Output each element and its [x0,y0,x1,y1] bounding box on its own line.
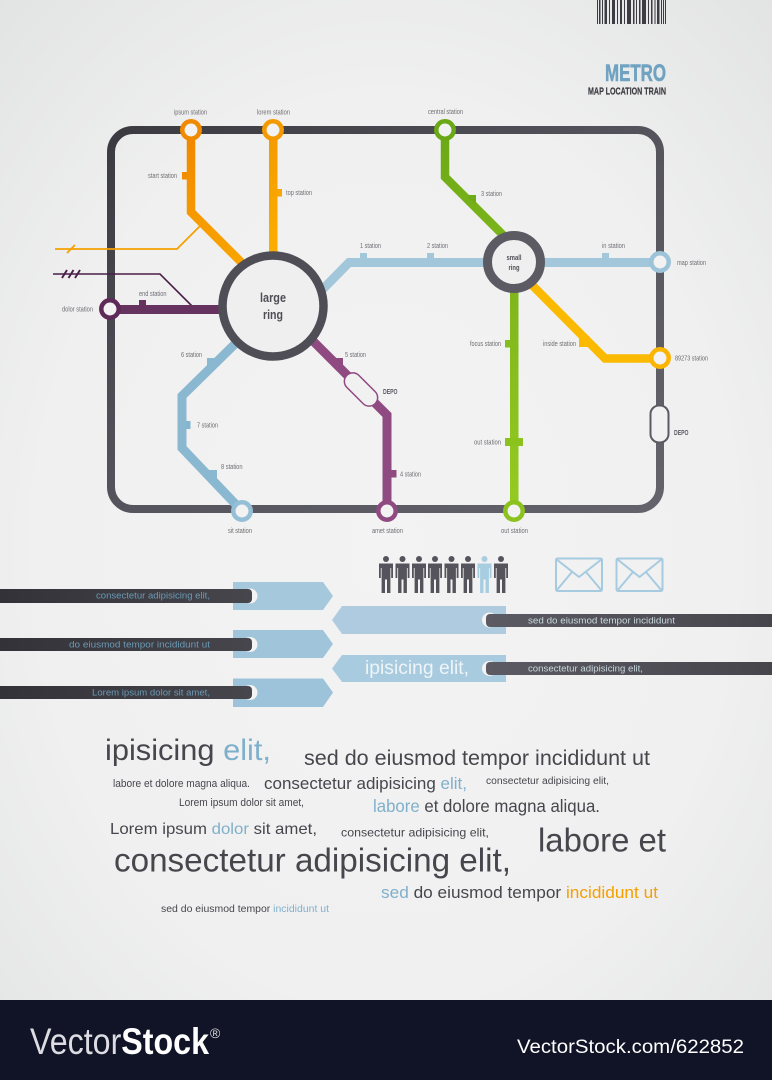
left tag 1 [0,582,333,610]
line: purple dolor [110,289,222,314]
small ring: ring [508,263,520,272]
line: light blue south west: 6 station [181,350,202,359]
text cloud: sed do eiusmod tempor incididunt ut [304,747,650,770]
text cloud: Lorem ipsum dolor sit amet, [110,821,317,838]
right tag 1 [332,606,772,634]
station labels: sit station [228,526,252,535]
footer band: VectorStock.com/622852 [517,1036,744,1058]
station labels: central station [428,107,463,116]
small ring: small [506,253,522,262]
text cloud: sed do eiusmod tempor incididunt ut [381,883,658,902]
left tag 1: consectetur adipisicing elit, [96,590,210,602]
line: orange top: top station [286,188,312,197]
line: green central: 3 station [481,189,502,198]
line: green south [470,290,523,511]
line: green central [445,130,503,235]
line: light blue south west: 8 station [221,462,242,471]
text cloud: sed do eiusmod tempor incididunt ut [161,903,329,915]
line: orange start [148,130,245,266]
depo: diagonal: DEPO [383,387,398,396]
barcode [597,0,666,24]
depo: right side: DEPO [674,428,689,437]
left tag 3 [0,678,333,707]
large ring: large [260,290,286,305]
people icons [379,556,508,593]
right tag 2: ipisicing elit, [365,658,469,679]
text cloud: consectetur adipisicing elit, [114,842,511,878]
line: light blue east [322,241,706,290]
line: light blue east: in station [602,241,625,250]
text cloud: ipisicing elit, [105,734,271,767]
station labels: out station [501,526,528,535]
line: purple dolor: end station [139,289,166,298]
line: purple south: 5 station [345,350,366,359]
right tag 1: sed do eiusmod tempor incididunt [528,616,675,626]
title: MAP LOCATION TRAIN [588,86,666,98]
metro frame line [111,130,660,509]
station labels [62,107,528,535]
left tag 2 [0,630,333,658]
line: light blue east: 1 station [360,241,381,250]
text cloud: consectetur adipisicing elit, [486,776,609,787]
right tag 2 [332,655,772,682]
text cloud: labore et dolore magna aliqua. [113,778,250,790]
station labels: dolor station [62,304,93,314]
depo: right side [650,406,689,442]
footer band: ® [210,1025,221,1041]
footer band [0,1000,772,1080]
line: orange start: start station [148,171,177,180]
title: METRO [605,60,666,87]
line: yellow: inside station [543,339,576,348]
text cloud: consectetur adipisicing elit, [341,826,489,840]
station labels: lorem station [257,108,290,116]
thin purple branch line [53,270,192,306]
large ring [222,256,324,356]
depo: diagonal [341,369,398,410]
station labels: amet station [372,526,403,535]
line: yellow: 89273 station [675,354,708,362]
left tag 3: Lorem ipsum dolor sit amet, [92,688,210,698]
line: light blue south west: 7 station [197,420,218,430]
left tag 2: do eiusmod tempor incididunt ut [69,640,210,650]
text cloud [105,734,666,915]
text cloud: labore et [538,822,666,858]
line: light blue south west [181,341,242,511]
title [588,60,666,98]
text cloud: consectetur adipisicing elit, [264,774,467,793]
right tag 2: consectetur adipisicing elit, [528,664,643,674]
text cloud: labore et dolore magna aliqua. [373,796,600,816]
small ring [488,236,540,288]
envelope icon 2 [616,558,662,591]
line: green south: out station [474,438,501,446]
line: purple south [312,340,421,505]
line: light blue east: 2 station [427,241,448,250]
stations [101,121,669,520]
line: green south: focus station [470,339,501,348]
envelope icon 1 [556,558,602,591]
large ring: ring [263,307,283,322]
line: light blue east: map station [677,258,706,267]
text cloud: Lorem ipsum dolor sit amet, [179,797,304,809]
line: yellow [531,284,708,362]
footer band: VectorStock [30,1021,209,1062]
thin orange branch line [55,226,200,253]
line: purple south: 4 station [400,470,421,478]
line: orange top [269,130,312,256]
station labels: ipsum station [174,108,207,116]
